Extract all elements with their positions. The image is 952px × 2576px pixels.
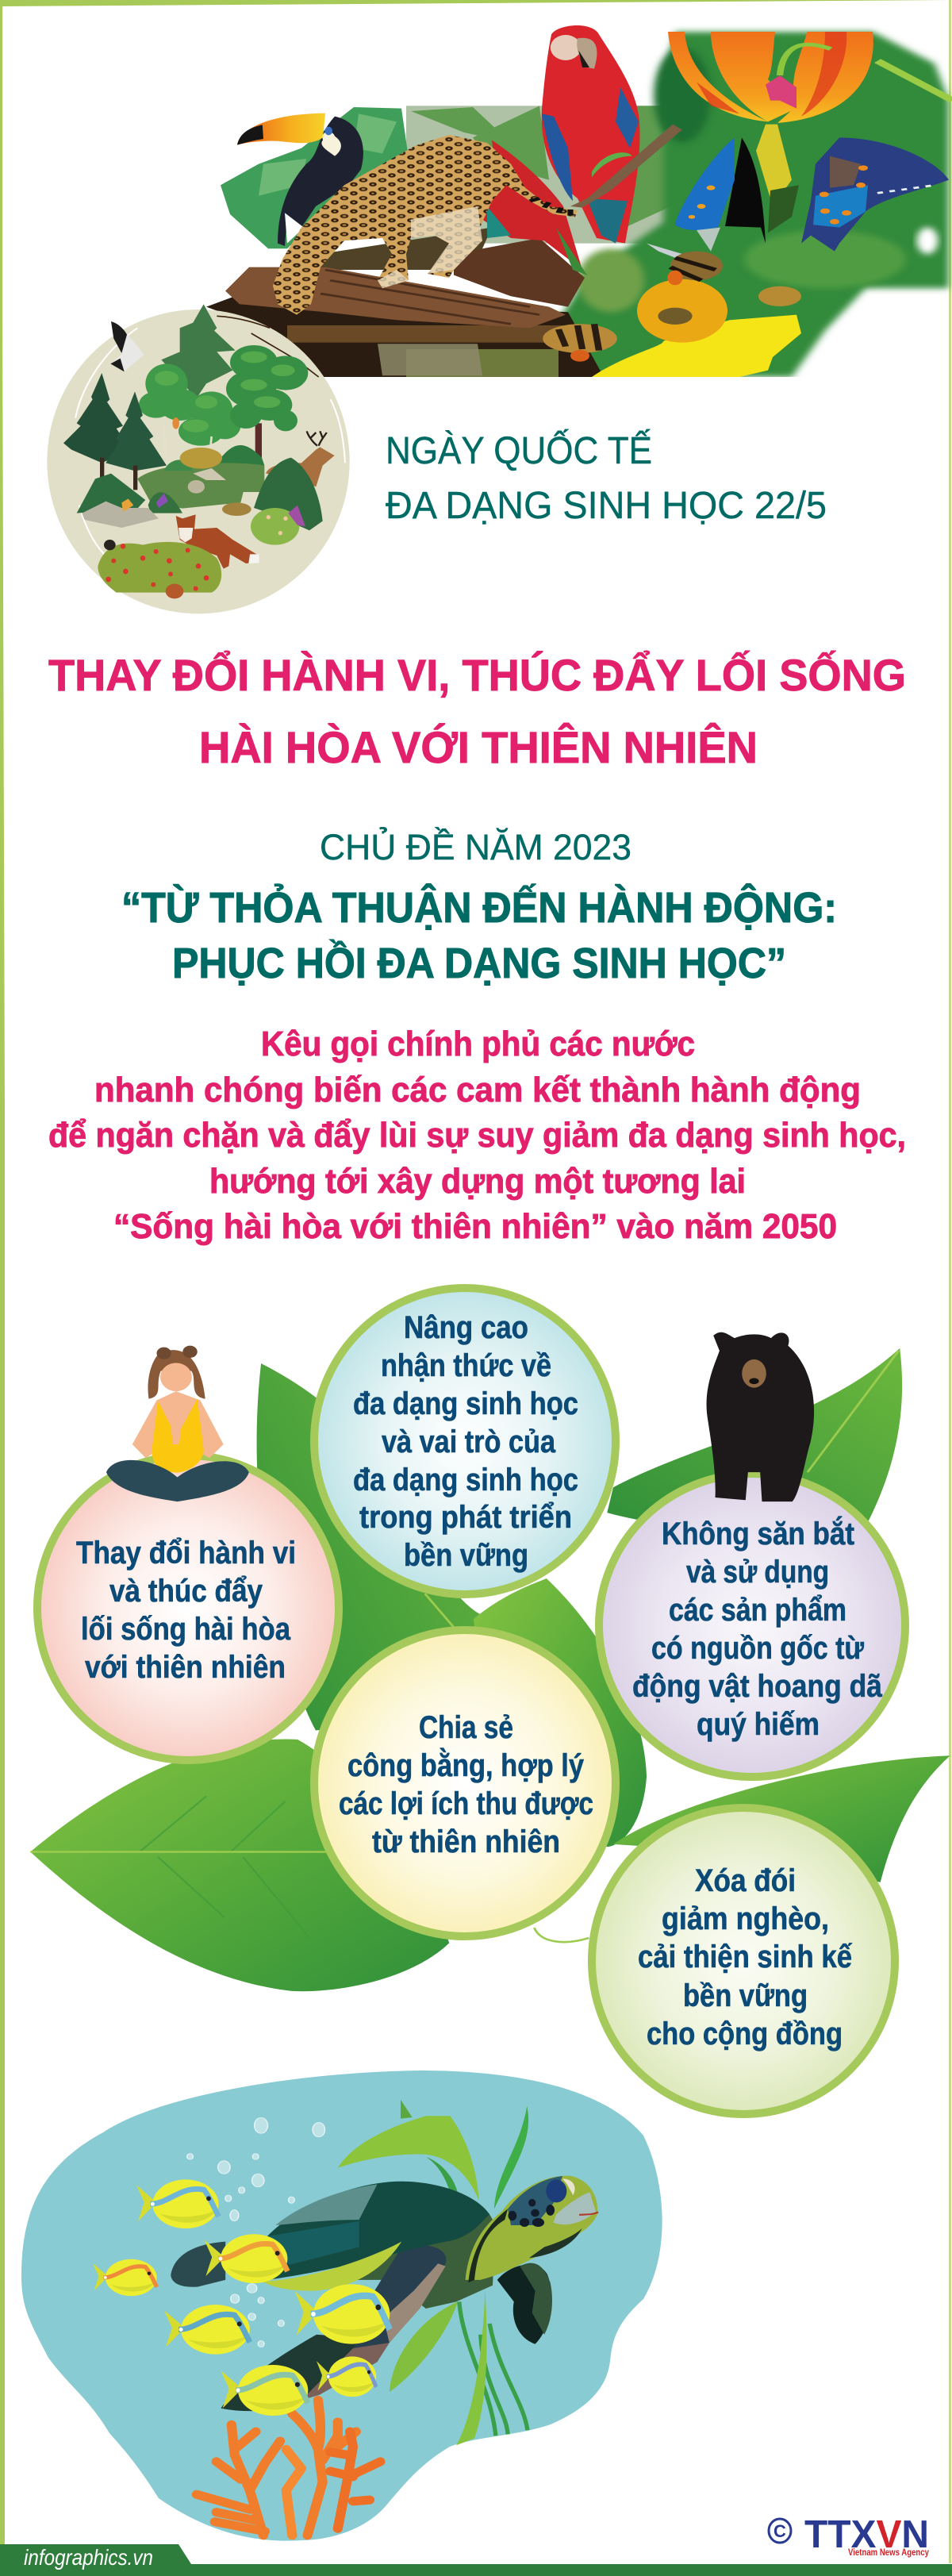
circle: no wildlife hunting: Không săn bắt: [662, 1515, 854, 1551]
squirrel: [166, 584, 183, 598]
circle: change behaviour: [37, 1455, 339, 1760]
main heading: [48, 650, 906, 772]
top conifer: [161, 304, 236, 399]
main heading line 1: THAY ĐỔI HÀNH VI, THÚC ĐẨY LỐI SỐNG: [48, 650, 906, 700]
seaweed: [338, 2100, 528, 2445]
fox: [176, 514, 259, 569]
front flipper plates: [353, 2245, 446, 2351]
dark conifers: [63, 373, 167, 490]
circle: poverty reduction: giảm nghèo,: [662, 1901, 829, 1936]
event title line 1: NGÀY QUỐC TẾ: [386, 429, 652, 472]
circle: poverty reduction: [592, 1808, 895, 2114]
circle: awareness: Nâng cao: [404, 1310, 528, 1345]
circle: fair sharing: Chia sẻ: [419, 1710, 513, 1745]
tortoise: [222, 502, 251, 516]
photo collage: wildlife: [206, 25, 952, 377]
leaf: upper right: [607, 1348, 902, 1533]
circle: change behaviour: với thiên nhiên: [85, 1650, 286, 1685]
left bush and rocks: [77, 474, 182, 528]
daisy and bees: [543, 244, 801, 377]
call to action paragraph: [48, 1025, 906, 1246]
hind flipper: [171, 2242, 225, 2287]
berry bush: [98, 540, 221, 593]
coral: [197, 2400, 380, 2536]
dark pond water and reflection: [206, 296, 604, 377]
turtle pond: water blob: [21, 2070, 662, 2541]
theme label: CHỦ ĐỀ NĂM 2023: [320, 827, 631, 867]
theme line 2: PHỤC HỒI ĐA DẠNG SINH HỌC”: [172, 940, 786, 987]
call to action paragraph: nhanh chóng biến các cam kết thành hành động: [94, 1071, 861, 1109]
site name: infographics.vn: [24, 2545, 153, 2570]
call to action paragraph: hướng tới xây dựng một tương lai: [209, 1162, 746, 1201]
leaf: centre: [474, 1578, 647, 1847]
lily flower: [668, 32, 952, 233]
green leaves: [30, 1348, 950, 1991]
macaw tail behind jaguar: [482, 140, 582, 270]
sand disc: [47, 310, 350, 613]
body skin: [353, 2214, 496, 2309]
circle: no wildlife hunting: và sử dụng: [686, 1555, 829, 1590]
deer: [266, 431, 335, 486]
circle: awareness: đa dạng sinh học: [353, 1386, 578, 1421]
logo: TTXVN: C: [774, 2521, 786, 2541]
call to action paragraph: “Sống hài hòa với thiên nhiên” vào năm 2050: [113, 1207, 837, 1246]
circle: poverty reduction: Xóa đói: [695, 1863, 796, 1898]
circle: poverty reduction: cho cộng đồng: [647, 2017, 843, 2051]
logs: [225, 238, 585, 328]
bubbles: [187, 2117, 324, 2347]
call to action paragraph: Kêu gọi chính phủ các nước: [261, 1025, 695, 1063]
neck and head: [466, 2176, 597, 2280]
yellow fish school: [93, 2179, 390, 2416]
theme 2023: [121, 827, 837, 987]
circle: fair sharing: các lợi ích thu được: [339, 1786, 593, 1821]
macaw: [542, 25, 682, 244]
meadow and back bushes: [217, 445, 264, 466]
flying bird: [110, 321, 144, 371]
circle: poverty reduction: bền vững: [683, 1978, 808, 2013]
circle: poverty reduction: cải thiện sinh kế: [638, 1940, 853, 1974]
icon: black bear: [707, 1332, 814, 1501]
theme line 1: “TỪ THỎA THUẬN ĐẾN HÀNH ĐỘNG:: [121, 883, 837, 932]
circle: awareness: [314, 1288, 616, 1594]
turtle: [171, 2176, 598, 2411]
circle: no wildlife hunting: các sản phẩm: [669, 1593, 846, 1628]
logo: TTXVN: Vietnam News Agency: [848, 2547, 929, 2558]
circle: change behaviour: và thúc đẩy: [109, 1574, 263, 1609]
event title: [386, 429, 827, 527]
leaf side veins: [140, 1796, 309, 1938]
event title line 2: ĐA DẠNG SINH HỌC 22/5: [386, 485, 827, 527]
round tree crowns: [139, 345, 308, 463]
circle: fair sharing: [314, 1630, 616, 1936]
circle: fair sharing: công bằng, hợp lý: [347, 1747, 585, 1783]
jaguar: [273, 135, 578, 315]
circle: no wildlife hunting: quý hiếm: [697, 1707, 820, 1742]
circle: awareness: và vai trò của: [382, 1424, 556, 1459]
circle: change behaviour: Thay đổi hành vi: [76, 1536, 296, 1571]
leaf midribs and stem: [30, 1351, 899, 1942]
logo: TTXVN: TTXVN: [804, 2513, 929, 2556]
flower bush: [251, 506, 305, 545]
brush strokes on the rim: [217, 316, 319, 377]
circle: awareness: bền vững: [404, 1538, 528, 1573]
butterflies: [675, 137, 949, 252]
circle: no wildlife hunting: có nguồn gốc từ: [651, 1631, 864, 1666]
circle: awareness: đa dạng sinh học: [353, 1463, 578, 1498]
leaf: lower left: [30, 1740, 449, 1991]
circle: no wildlife hunting: động vật hoang dã: [632, 1669, 883, 1704]
circle: no wildlife hunting: [599, 1474, 905, 1777]
leaf: upper left: [257, 1363, 480, 1730]
call to action paragraph: để ngăn chặn và đẩy lùi sự suy giảm đa dạng sinh học,: [48, 1116, 906, 1155]
backdrop foliage: [221, 32, 949, 377]
front paddle: [497, 2264, 551, 2344]
forest circle illustration: [47, 304, 350, 613]
right dark bush: [254, 458, 323, 530]
leaf: lower right: [613, 1755, 950, 1882]
circle: awareness: trong phát triển: [359, 1500, 572, 1535]
toucan: [237, 113, 363, 246]
footer bar: [0, 2544, 952, 2576]
shell: [261, 2182, 489, 2280]
rear lower flipper: [221, 2335, 390, 2411]
main heading line 2: HÀI HÒA VỚI THIÊN NHIÊN: [199, 722, 758, 772]
circle: awareness: nhận thức về: [381, 1348, 551, 1383]
icon: meditating woman: [106, 1346, 249, 1501]
circle: fair sharing: từ thiên nhiên: [372, 1824, 560, 1859]
circle: change behaviour: lối sống hài hòa: [81, 1612, 291, 1647]
turtle scene: [93, 2100, 598, 2536]
